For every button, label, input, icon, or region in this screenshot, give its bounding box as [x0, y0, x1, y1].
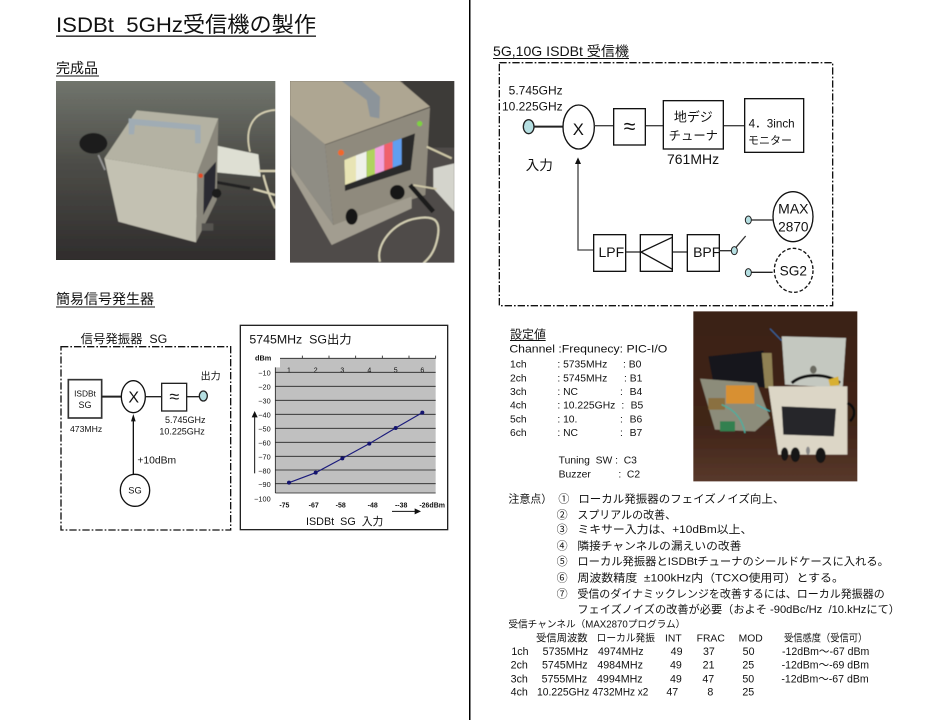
- channel rows: :: [621, 401, 624, 412]
- y axis labels: −20: [258, 383, 271, 392]
- MAX2870 oscillator: [773, 192, 813, 242]
- data line: [287, 411, 424, 485]
- channel numbers: 3: [340, 368, 344, 375]
- channel rows: : B1: [624, 373, 643, 384]
- chart: 5745MHz SG output: [240, 325, 448, 530]
- channel numbers: 6: [420, 368, 424, 375]
- channel rows: : 10.225GHz: [557, 401, 615, 412]
- channel rows: B6: [630, 414, 643, 425]
- LPF block: [594, 235, 626, 271]
- table rows: -12dBm～-67 dBm: [781, 673, 869, 685]
- tuner block: [663, 101, 723, 149]
- channel rows: 6ch: [510, 428, 527, 439]
- table title: 受信チャンネル（MAX2870プログラム）: [508, 618, 685, 630]
- note items: ④: [557, 540, 568, 553]
- filter block: [614, 109, 645, 145]
- note items: ローカル発振器のフェイズノイズ向上、: [578, 491, 784, 505]
- channel rows: B7: [630, 428, 643, 439]
- y axis labels: −10: [258, 369, 271, 378]
- note items: 周波数精度 ±100kHz内（TCXO使用可）とする。: [577, 570, 844, 584]
- channel rows: Tuning SW : C3: [559, 456, 637, 467]
- amplifier block: [640, 235, 672, 271]
- output frequencies: 10.225GHz: [159, 426, 205, 436]
- channel numbers: 1: [287, 368, 291, 375]
- heading: finished product: 完成品: [56, 60, 98, 76]
- note items: ⑤: [557, 555, 568, 568]
- x axis labels: -75: [279, 502, 290, 509]
- channel rows: : 5745MHz: [557, 373, 607, 384]
- arrow: SG to mixer: [131, 414, 136, 474]
- block: ISDBt SG: ISDBt: [74, 389, 97, 399]
- y axis labels: −60: [258, 439, 271, 448]
- table rows: 25: [742, 687, 754, 699]
- photo: receiver showing colour bars: [287, 78, 457, 265]
- block: ISDBt SG: SG: [79, 400, 91, 410]
- channel rows: : NC: [557, 428, 579, 439]
- x axis title: ISDBt SG 入力: [306, 515, 383, 528]
- BPF block: BPF: [693, 244, 720, 260]
- arrow: LPF to mixer: [575, 157, 594, 250]
- note items: フェイズノイズの改善が必要（およそ -90dBc/Hz /10.kHzにて）: [577, 602, 900, 616]
- mixer: X: [573, 120, 584, 139]
- monitor block: [745, 99, 804, 152]
- tuner frequency: 761MHz: [667, 151, 719, 167]
- settings heading: 設定値: [510, 326, 546, 341]
- table rows: 5735MHz: [543, 646, 588, 658]
- mixer: [121, 381, 145, 413]
- table header: MOD: [739, 633, 763, 644]
- heading: simple signal generator: 簡易信号発生器: [56, 291, 154, 307]
- SG2 oscillator: [774, 248, 813, 292]
- photo: disassembled receiver: [690, 308, 861, 485]
- channel rows: Buzzer: [559, 469, 591, 480]
- channel rows: 3ch: [510, 387, 527, 398]
- input frequencies: [502, 83, 563, 113]
- note items: スプリアルの改善、: [577, 507, 676, 521]
- channel numbers: [287, 368, 424, 375]
- table rows: 25: [742, 660, 754, 672]
- monitor block: モニター: [748, 134, 792, 147]
- output frequencies: [159, 415, 206, 436]
- channel rows: 4ch: [510, 401, 527, 412]
- table header: FRAC: [697, 633, 725, 644]
- table rows: 4974MHz: [598, 646, 644, 658]
- receive channel table: [508, 618, 869, 699]
- table rows: 21: [703, 660, 715, 672]
- filter block: ≈: [624, 114, 636, 138]
- tuner block: チューナ: [669, 129, 718, 143]
- photo: receiver with handle on floor: [53, 78, 280, 265]
- channel rows: :: [620, 428, 623, 439]
- table header: [536, 631, 867, 644]
- note items: ①: [558, 492, 569, 505]
- panel title: 信号発振器 SG: [81, 332, 167, 346]
- table rows: 49: [671, 646, 683, 658]
- x axis labels: -67: [309, 502, 319, 509]
- oscillator frequency: 473MHz: [70, 424, 102, 434]
- note items: ⑦: [557, 588, 568, 601]
- channel rows: : NC: [557, 387, 579, 398]
- y axis labels: −70: [258, 453, 271, 462]
- channel numbers: 5: [394, 368, 398, 375]
- input port: [523, 120, 534, 134]
- table rows: 47: [666, 687, 678, 699]
- x arrow: [392, 508, 421, 514]
- y axis labels: −30: [258, 397, 271, 406]
- table rows: 1ch: [511, 646, 529, 658]
- table rows: 50: [742, 673, 754, 685]
- table rows: 2ch: [511, 660, 528, 672]
- x axis labels: -48: [368, 502, 378, 509]
- table rows: 49: [670, 660, 682, 672]
- table rows: 3ch: [511, 673, 528, 685]
- panel: receiver block diagram: [499, 63, 833, 306]
- channel rows: : 5735MHz: [557, 360, 607, 371]
- y axis labels: −80: [258, 466, 271, 475]
- channel rows: :: [620, 387, 623, 398]
- note items: ③: [557, 523, 568, 536]
- MAX2870 oscillator: MAX: [778, 200, 809, 216]
- channel rows: B5: [631, 401, 644, 412]
- switch: [719, 216, 773, 277]
- channel rows: [510, 360, 644, 480]
- filter block: ≈: [169, 387, 179, 407]
- chart title: 5745MHz SG出力: [249, 332, 352, 346]
- x axis labels: -58: [336, 502, 346, 509]
- note items: 受信のダイナミックレンジを改善するには、ローカル発振器の: [577, 587, 885, 601]
- table header: INT: [665, 633, 682, 644]
- table rows: 37: [703, 646, 715, 658]
- note items: ②: [557, 508, 568, 521]
- mixer: [563, 105, 594, 149]
- local oscillator SG: SG: [128, 486, 142, 496]
- note items: ⑥: [557, 571, 568, 584]
- tuner block: 地デジ: [674, 109, 713, 124]
- x axis labels: [279, 502, 445, 509]
- settings table: [509, 326, 668, 480]
- x axis labels: --38: [395, 502, 408, 509]
- block: ISDBt SG: [68, 380, 102, 418]
- y axis labels: −100: [254, 494, 271, 503]
- MAX2870 oscillator: 2870: [778, 219, 809, 234]
- table rows: -12dBm～-67 dBm: [782, 646, 869, 658]
- table rows: 4ch: [511, 687, 528, 699]
- channel rows: 2ch: [510, 373, 527, 384]
- level label: +10dBm: [137, 455, 176, 466]
- channel rows: :: [620, 414, 623, 425]
- y axis labels: −90: [258, 480, 271, 489]
- channel rows: B4: [630, 387, 643, 398]
- table rows: 4732MHz x2: [592, 687, 648, 699]
- table rows: 4984MHz: [597, 660, 643, 672]
- notes list: [508, 491, 900, 616]
- mixer: X: [128, 390, 139, 407]
- channel numbers: 2: [314, 368, 318, 375]
- y arrow: [252, 411, 258, 473]
- heading: receiver: 5G,10G ISDBt 受信機: [493, 44, 629, 59]
- channel rows: 5ch: [510, 414, 527, 425]
- notes label: 注意点）: [508, 492, 552, 505]
- input label: 入力: [526, 158, 553, 173]
- output label: 出力: [201, 369, 221, 382]
- monitor block: 4．3inch: [749, 117, 795, 130]
- note items: [557, 491, 900, 616]
- title: ISDBt 5GHz受信機の製作: [56, 13, 316, 37]
- table rows: 5745MHz: [542, 660, 588, 672]
- table rows: 5755MHz: [542, 673, 587, 685]
- input frequencies: 10.225GHz: [502, 99, 563, 113]
- panel: signal generator block diagram: [61, 332, 231, 530]
- LPF block: LPF: [599, 244, 624, 260]
- y axis labels: −40: [258, 411, 271, 420]
- y axis labels: dBm: [255, 353, 272, 362]
- y axis labels: [254, 353, 272, 503]
- channel rows: : 10.: [557, 414, 577, 425]
- output frequencies: 5.745GHz: [165, 415, 206, 425]
- table rows: -12dBm～-69 dBm: [782, 660, 869, 672]
- note items: 隣接チャンネルの漏えいの改善: [577, 539, 741, 553]
- table rows: 8: [707, 687, 713, 699]
- SG2 oscillator: SG2: [780, 263, 807, 278]
- note items: ミキサー入力は、+10dBm以上、: [577, 523, 752, 536]
- plot area: [275, 358, 436, 493]
- table rows: 47: [702, 673, 714, 685]
- channel rows: : B0: [623, 360, 642, 371]
- table rows: 10.225GHz: [537, 687, 589, 699]
- table header: 受信感度（受信可）: [784, 631, 867, 644]
- channel rows: 1ch: [510, 360, 527, 371]
- x axis labels: -26dBm: [419, 502, 445, 509]
- table header: 受信周波数: [536, 631, 588, 644]
- channel rows: : C2: [618, 469, 640, 480]
- table rows: 4994MHz: [597, 673, 643, 685]
- BPF block: [687, 235, 720, 271]
- note items: ローカル発振器とISDBtチューナのシールドケースに入れる。: [577, 554, 889, 568]
- table rows: 49: [670, 673, 682, 685]
- table header: ローカル発振: [597, 631, 656, 644]
- table rows: 50: [743, 646, 755, 658]
- output port: [199, 391, 207, 401]
- table rows: [511, 646, 869, 699]
- input frequencies: 5.745GHz: [509, 83, 563, 97]
- settings column header: Channel :Frequnecy: PIC-I/O: [509, 344, 668, 356]
- local oscillator SG: [120, 474, 150, 506]
- channel numbers: 4: [367, 368, 371, 375]
- filter block: [162, 383, 187, 411]
- y axis labels: −50: [258, 425, 271, 434]
